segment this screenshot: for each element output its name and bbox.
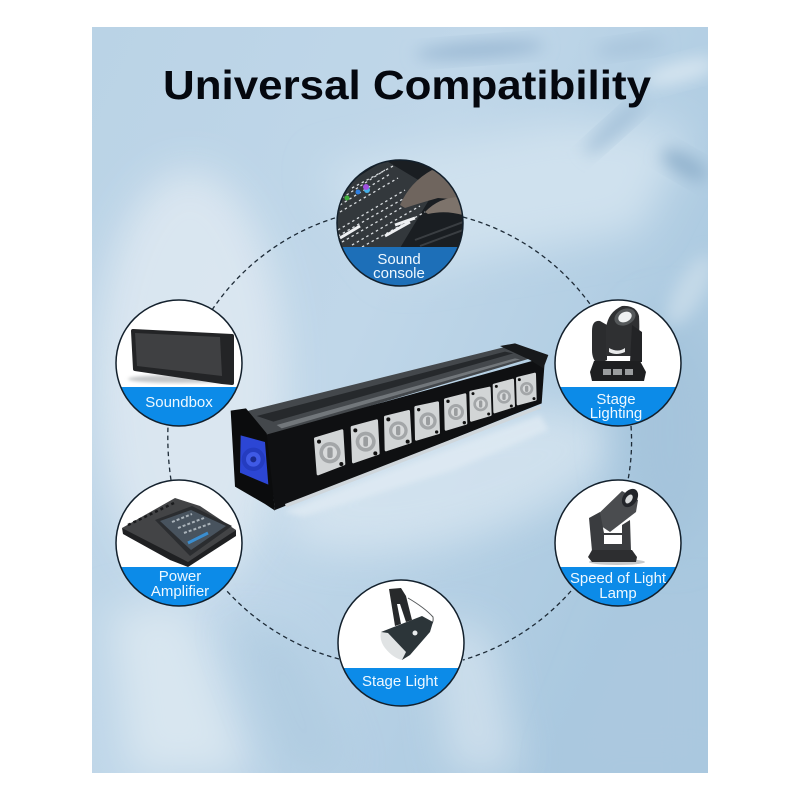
dashed connecting ring (168, 217, 632, 660)
badge: soundbox (116, 300, 242, 427)
product shadow (283, 415, 548, 517)
badge: sound console: console (373, 265, 425, 282)
icon: par spotlight (380, 588, 433, 660)
label: Soundbox (145, 394, 213, 411)
label: Stage (596, 391, 636, 408)
icon: moving head light (590, 305, 646, 381)
title: Universal Compatibility (163, 62, 651, 108)
end cap (231, 408, 275, 511)
icon: amplifier console (122, 498, 236, 567)
badge: speed of light lamp (555, 480, 681, 607)
output sockets (315, 374, 535, 474)
background panel (92, 27, 722, 773)
bottom edge highlight (285, 405, 541, 508)
badge: speed of light lamp: Lamp (599, 585, 637, 602)
label: Sound (377, 251, 421, 268)
label: Stage Light (362, 673, 439, 690)
badge: power amplifier: Amplifier (151, 583, 209, 600)
label: Power (159, 568, 201, 585)
product: power distribution bar (231, 343, 548, 517)
icon: spot lamp (588, 486, 645, 565)
badge: stage lighting (555, 300, 681, 427)
badge: stage light (338, 580, 464, 708)
icon: mixing desk (337, 160, 463, 248)
badge: sound console (337, 160, 463, 287)
icon: speaker (128, 331, 232, 383)
front face (265, 357, 545, 510)
badge: stage lighting: Lighting (590, 405, 642, 422)
label: Speed of Light (570, 570, 667, 587)
blue input socket (240, 435, 268, 485)
top rail (245, 347, 542, 437)
badge: power amplifier (116, 480, 242, 607)
